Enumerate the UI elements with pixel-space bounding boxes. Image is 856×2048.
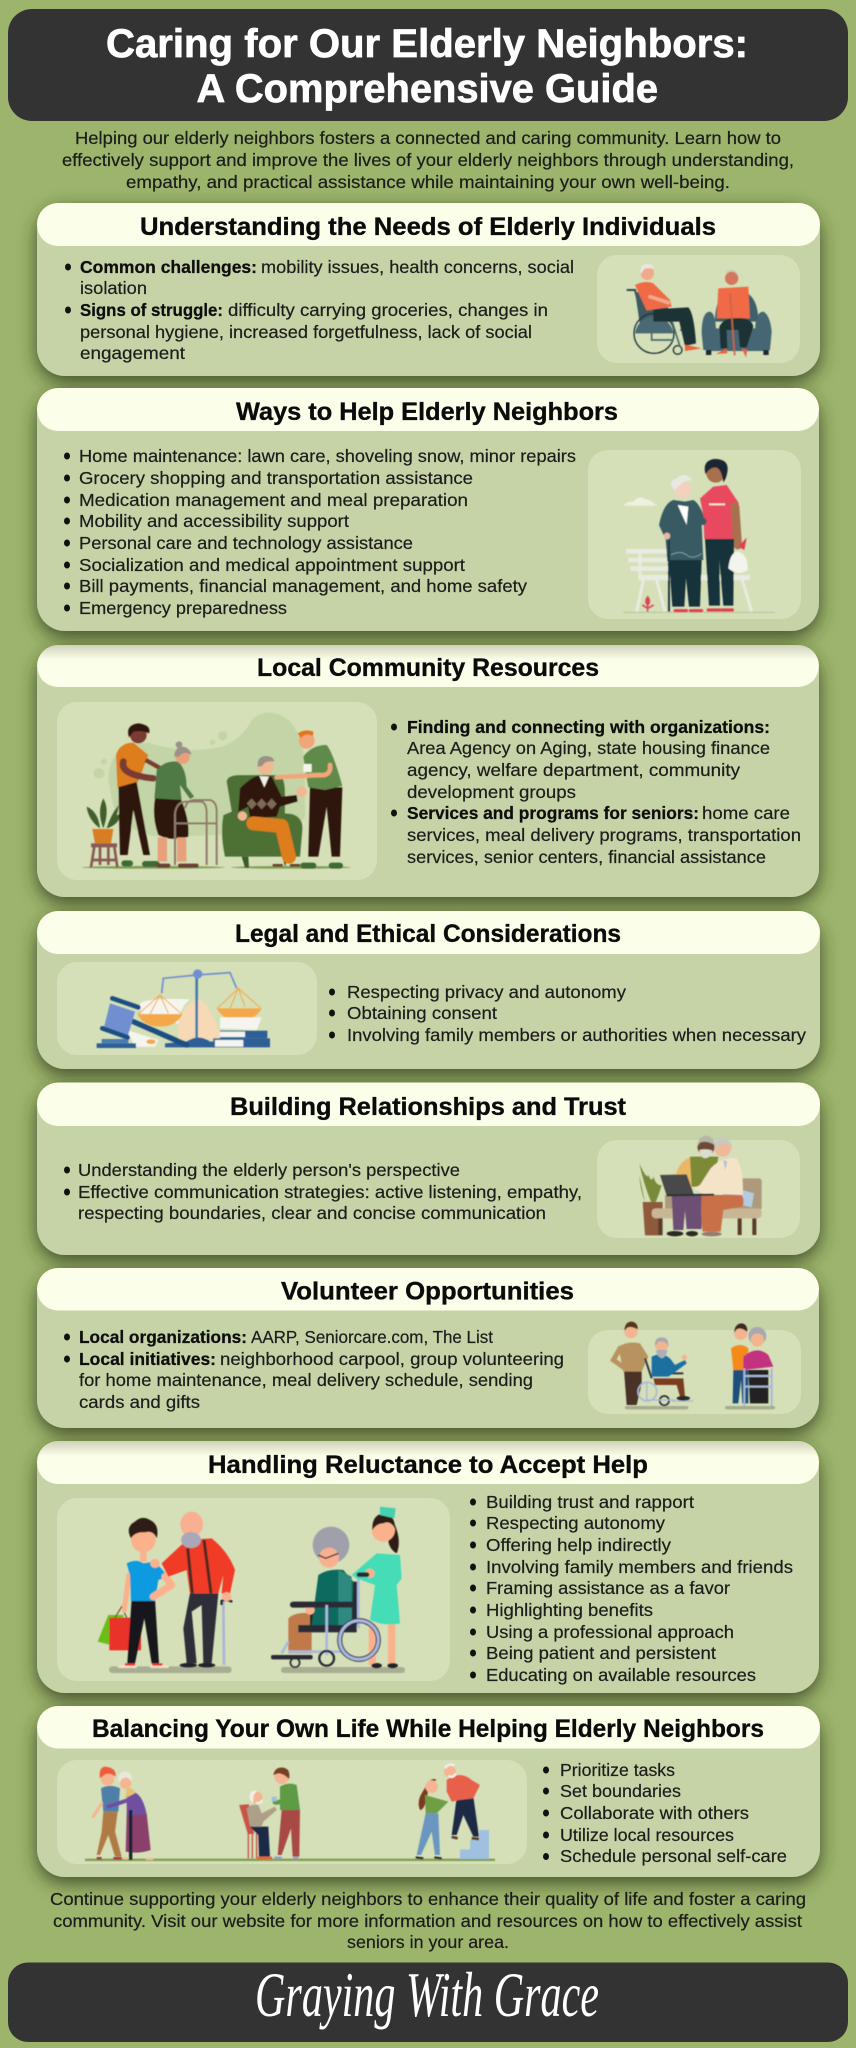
bullet list: community resources: services, meal delivery programs, transportation (407, 825, 801, 845)
image panel: family helper and nurse with seniors (57, 1498, 450, 1681)
bullet list: reluctance: Framing assistance as a favor (486, 1578, 730, 1598)
bullet list: volunteer (64, 1327, 564, 1412)
bullet list: community resources (391, 717, 801, 867)
image panel: volunteer with senior at a bench (588, 450, 801, 619)
bullet list: community resources: Finding and connecting with organizations: (407, 717, 770, 737)
title banner: A Comprehensive Guide (196, 67, 658, 111)
panel: handling reluctance (37, 1441, 819, 1693)
bullet list: ways to help: Mobility and accessibility support (79, 511, 349, 531)
panel: volunteer opportunities (37, 1268, 819, 1428)
bullet list: needs: Signs of struggle: (80, 300, 223, 320)
bullet list: community resources: Services and programs for seniors: (407, 803, 699, 823)
bullet list: relationships (64, 1160, 582, 1223)
bullet list: legal (329, 982, 806, 1045)
bullet list: ways to help (64, 446, 576, 618)
closing text (50, 1889, 806, 1952)
bullet list: ways to help: Home maintenance: lawn care, shoveling snow, minor repairs (79, 446, 576, 466)
footer banner: Graying With Grace (255, 1959, 599, 2030)
panel: local community resources (37, 645, 819, 897)
bullet list: needs (65, 257, 574, 363)
bullet list: relationships: Understanding the elderly person's perspective (78, 1160, 460, 1180)
bullet list: ways to help: Emergency preparedness (79, 598, 287, 618)
bullet list: community resources: services, senior centers, financial assistance (407, 847, 766, 867)
image panel: caregivers with seniors (57, 702, 377, 880)
bullet list: needs: mobility issues, health concerns, social (261, 257, 574, 277)
image panel: wheelchair and armchair seniors (597, 255, 800, 363)
image panel: three helper scenes (57, 1760, 527, 1864)
intro text (62, 128, 794, 192)
panel: ways to help: Ways to Help Elderly Neighbors (236, 398, 618, 426)
bullet list: volunteer: neighborhood carpool, group volunteering (220, 1349, 564, 1369)
closing text: Continue supporting your elderly neighbors to enhance their quality of life and foster a caring (50, 1889, 806, 1909)
title banner (8, 9, 848, 121)
bullet list: ways to help: Grocery shopping and transportation assistance (79, 468, 473, 488)
bullet list: reluctance: Educating on available resources (486, 1665, 756, 1685)
panel: legal and ethical (37, 911, 820, 1069)
bullet list: ways to help: Socialization and medical appointment support (79, 555, 465, 575)
bullet list: legal: Obtaining consent (347, 1003, 497, 1023)
bullet list: needs: difficulty carrying groceries, changes in (228, 300, 548, 320)
panel: volunteer opportunities: Volunteer Opportunities (281, 1278, 574, 1306)
panel: balancing your own life (37, 1706, 820, 1877)
intro text: empathy, and practical assistance while maintaining your own well-being. (126, 172, 730, 192)
bullet list: volunteer: for home maintenance, meal delivery schedule, sending (79, 1370, 533, 1390)
bullet list: community resources: Area Agency on Aging, state housing finance (407, 738, 770, 758)
bullet list: ways to help: Medication management and meal preparation (79, 490, 468, 510)
bullet list: volunteer: Local organizations: (79, 1327, 247, 1347)
bullet list: community resources: home care (702, 803, 790, 823)
bullet list: relationships: Effective communication strategies: active listening, empathy, (78, 1182, 582, 1202)
image panel: scales and gavel (57, 962, 317, 1055)
bullet list: reluctance: Respecting autonomy (486, 1513, 665, 1533)
bullet list: reluctance: Being patient and persistent (486, 1643, 716, 1663)
closing text: community. Visit our website for more information and resources on how to effectively assist (53, 1911, 802, 1931)
bullet list: needs: Common challenges: (80, 257, 257, 277)
bullet list: ways to help: Personal care and technology assistance (79, 533, 413, 553)
bullet list: needs: personal hygiene, increased forgetfulness, lack of social (80, 322, 532, 342)
bullet list: legal: Involving family members or authorities when necessary (347, 1025, 806, 1045)
panel: local community resources: Local Community Resources (257, 654, 599, 682)
bullet list: legal: Respecting privacy and autonomy (347, 982, 626, 1002)
panel: understanding the needs: Understanding the Needs of Elderly Individuals (140, 213, 716, 241)
bullet list: ways to help: Bill payments, financial management, and home safety (79, 576, 527, 596)
panel: balancing your own life: Balancing Your Own Life While Helping Elderly Neighbors (92, 1715, 764, 1743)
image panel: helpers with senior in wheelchair and walker (588, 1322, 801, 1414)
bullet list: balancing: Set boundaries (560, 1781, 681, 1801)
bullet list: community resources: development groups (407, 782, 576, 802)
closing text: seniors in your area. (347, 1932, 509, 1952)
bullet list: volunteer: AARP, Seniorcare.com, The List (251, 1327, 493, 1347)
bullet list: reluctance: Involving family members and friends (486, 1557, 793, 1577)
footer banner (8, 1959, 848, 2042)
bullet list: balancing: Prioritize tasks (560, 1760, 675, 1780)
panel: building relationships: Building Relationships and Trust (230, 1093, 627, 1121)
bullet list: balancing: Utilize local resources (560, 1825, 734, 1845)
intro text: Helping our elderly neighbors fosters a connected and caring community. Learn how to (75, 128, 781, 148)
bullet list: community resources: agency, welfare department, community (407, 760, 740, 780)
bullet list: reluctance (470, 1492, 793, 1685)
bullet list: reluctance: Offering help indirectly (486, 1535, 671, 1555)
bullet list: reluctance: Building trust and rapport (486, 1492, 694, 1512)
bullet list: volunteer: Local initiatives: (79, 1349, 216, 1369)
title banner: Caring for Our Elderly Neighbors: (106, 22, 748, 66)
panel: legal and ethical: Legal and Ethical Considerations (235, 920, 621, 948)
bullet list: reluctance: Highlighting benefits (486, 1600, 653, 1620)
panel: building relationships (37, 1082, 820, 1255)
intro text: effectively support and improve the lives of your elderly neighbors through understanding, (62, 150, 794, 170)
bullet list: balancing (543, 1760, 787, 1866)
panel: handling reluctance: Handling Reluctance to Accept Help (208, 1451, 648, 1479)
bullet list: needs: engagement (80, 343, 185, 363)
panel: ways to help (37, 388, 819, 631)
bullet list: relationships: respecting boundaries, clear and concise communication (78, 1203, 546, 1223)
image panel: couple with laptop on sofa (597, 1136, 800, 1238)
bullet list: volunteer: cards and gifts (79, 1392, 200, 1412)
bullet list: balancing: Collaborate with others (560, 1803, 749, 1823)
bullet list: balancing: Schedule personal self-care (560, 1846, 787, 1866)
bullet list: needs: isolation (80, 278, 147, 298)
bullet list: reluctance: Using a professional approach (486, 1622, 734, 1642)
panel: understanding the needs (37, 203, 820, 376)
